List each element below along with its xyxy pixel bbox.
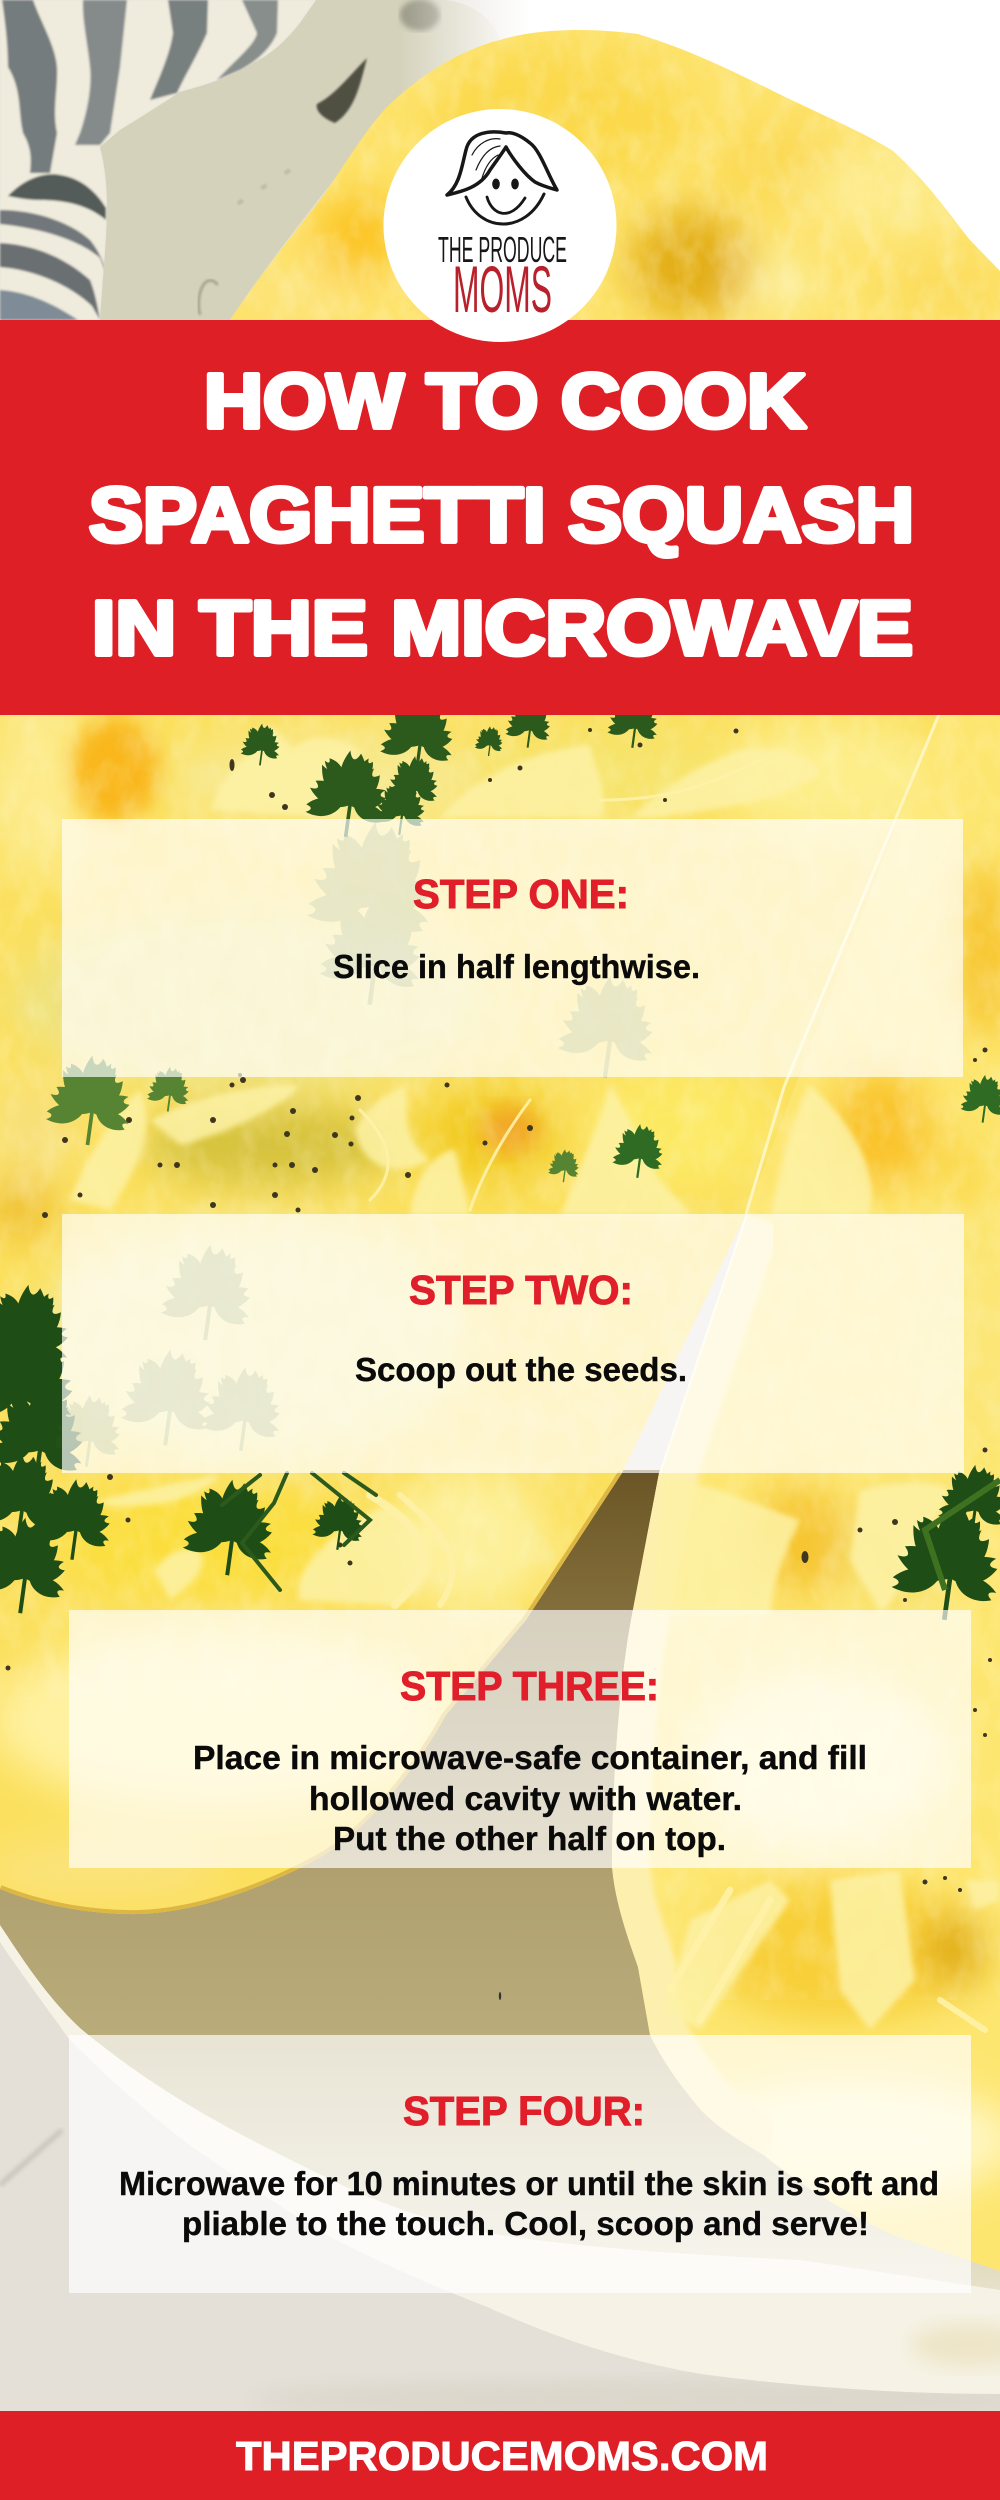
heading: step one: STEP ONE: [413, 871, 629, 917]
text: step three instruction: Place in microwave-safe container, and fill [193, 1739, 867, 1776]
pale spaghetti clumps [70, 725, 1000, 2030]
white background top right [400, 0, 1000, 320]
squash top piece [230, 30, 1000, 320]
logo badge [384, 109, 616, 342]
text: step four instruction: Microwave for 10 minutes or until the skin is soft and [119, 2165, 939, 2202]
logo badge: MOMS [453, 252, 552, 326]
right squash half [600, 700, 1000, 2300]
website address: THEPRODUCEMOMS.COM [236, 2433, 768, 2479]
heading: step three: STEP THREE: [400, 1663, 659, 1709]
black pepper specks [6, 728, 992, 2000]
panel: step three [69, 1610, 971, 1868]
title text: HOW TO COOK [204, 358, 806, 444]
title banner [0, 320, 1000, 715]
text: step three instruction [193, 1739, 867, 1857]
plate well [0, 1470, 1000, 2290]
spaghetti strands [360, 760, 985, 2030]
parsley sprigs [0, 694, 1000, 1620]
title text [89, 358, 914, 672]
text: step two instruction: Scoop out the seeds. [355, 1351, 687, 1388]
text: step four instruction: pliable to the touch. Cool, scoop and serve! [182, 2205, 869, 2242]
marble corner [100, 0, 500, 320]
title text: IN THE MICROWAVE [92, 586, 913, 672]
text: step three instruction: hollowed cavity with water. [309, 1780, 742, 1817]
footer banner [0, 2411, 1000, 2500]
text: step four instruction [119, 2165, 939, 2242]
towel [0, 0, 316, 320]
white plate rim [0, 1700, 1000, 2394]
text: step three instruction: Put the other half on top. [333, 1820, 726, 1857]
logo badge: THE PRODUCE [438, 229, 567, 270]
heading: step two: STEP TWO: [409, 1267, 633, 1313]
squash seam [746, 700, 945, 1214]
heading: step four: STEP FOUR: [403, 2088, 645, 2134]
ghosted herbs under the panels [52, 821, 656, 1466]
left squash half [0, 715, 937, 1914]
title text: SPAGHETTI SQUASH [89, 472, 914, 558]
panel: step one [62, 819, 963, 1077]
text: step one instruction: Slice in half lengthwise. [333, 948, 700, 985]
icon: smiling mom face [447, 132, 557, 224]
panel: step two [62, 1214, 964, 1473]
panel: step four [69, 2035, 971, 2293]
